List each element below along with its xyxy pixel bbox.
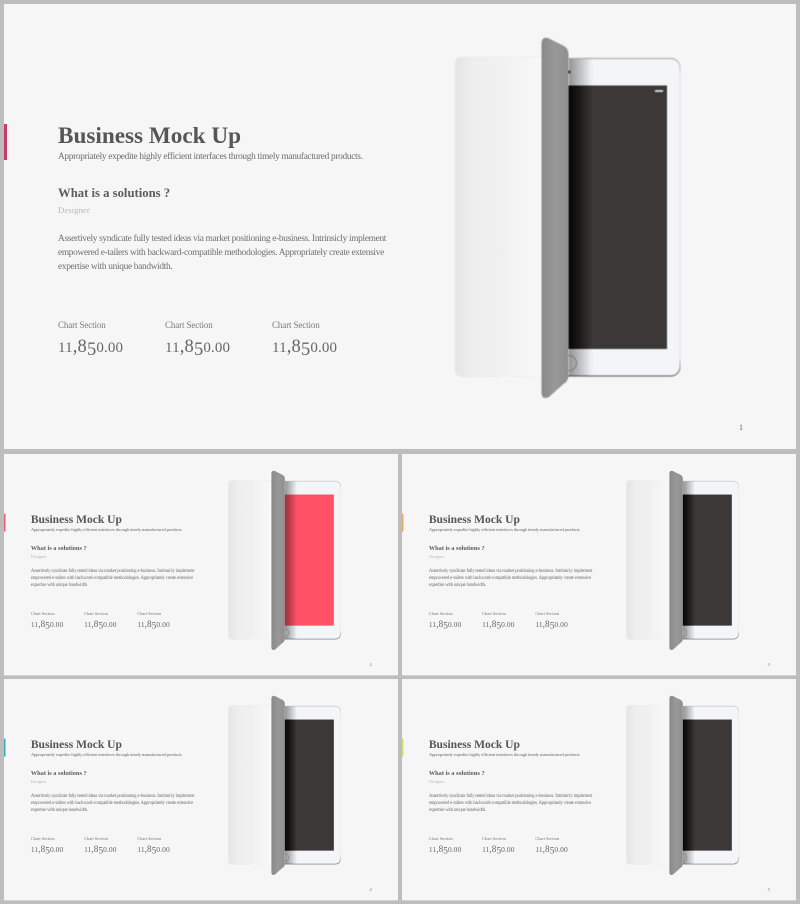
tablet mockup xyxy=(626,696,739,875)
body text xyxy=(429,793,592,813)
tablet mockup xyxy=(228,696,341,875)
body text: expertise with unique bandwidth. xyxy=(429,808,486,813)
tablet screen xyxy=(545,86,667,349)
value 1: 11,850.00 xyxy=(31,845,63,856)
title: Business Mock Up xyxy=(58,123,241,149)
slide 1: large xyxy=(4,4,796,449)
chart label 1: Chart Section xyxy=(429,611,453,616)
cover panel left xyxy=(626,480,650,640)
chart label 2: Chart Section xyxy=(84,611,108,616)
home button xyxy=(562,356,576,370)
chart label 1: Chart Section xyxy=(429,836,453,841)
role label: Designer xyxy=(429,554,445,559)
slide 3: orange accent xyxy=(402,454,796,675)
gray flap xyxy=(669,471,683,650)
chart label 3: Chart Section xyxy=(272,320,320,330)
value 3: 11,850.00 xyxy=(272,337,337,360)
role label: Designer xyxy=(58,205,90,215)
slide 2: pink xyxy=(4,454,398,675)
value 3: 11,850.00 xyxy=(137,845,170,856)
subtitle: Appropriately expedite highly efficient interfaces through timely manufactured products. xyxy=(31,753,182,758)
tablet body xyxy=(671,706,738,864)
page number: 4 xyxy=(370,887,372,892)
body text: Assertively syndicate fully tested ideas via market positioning e-business. Intrinsicly implement xyxy=(58,234,386,244)
page number: 5 xyxy=(768,887,770,892)
cover panel middle xyxy=(253,705,272,865)
value 1: 11,850.00 xyxy=(58,337,123,360)
cover panel middle xyxy=(651,705,670,865)
value 2: 11,850.00 xyxy=(84,620,117,631)
role label: Designer xyxy=(429,779,445,784)
chart label 1: Chart Section xyxy=(31,611,55,616)
cover panel left xyxy=(228,480,252,640)
home button xyxy=(281,854,289,861)
value 2: 11,850.00 xyxy=(482,620,515,631)
tablet mockup xyxy=(228,470,341,650)
subtitle: Appropriately expedite highly efficient interfaces through timely manufactured products. xyxy=(31,528,182,533)
chart label 2: Chart Section xyxy=(482,611,506,616)
gray flap xyxy=(542,38,568,398)
chart label 2: Chart Section xyxy=(84,836,108,841)
body text: Assertively syndicate fully tested ideas via market positioning e-business. Intrinsicly implement xyxy=(429,793,592,798)
body text xyxy=(429,568,592,588)
value 3: 11,850.00 xyxy=(535,620,568,631)
body text: empowered e-tailers with backward-compatible methodologies. Appropriately create extensive xyxy=(58,248,384,258)
subtitle: Appropriately expedite highly efficient interfaces through timely manufactured products. xyxy=(58,152,363,162)
subtitle: Appropriately expedite highly efficient interfaces through timely manufactured products. xyxy=(429,528,580,533)
body text: expertise with unique bandwidth. xyxy=(429,583,486,588)
heading: What is a solutions ? xyxy=(429,769,485,776)
title: Business Mock Up xyxy=(31,738,122,751)
body text xyxy=(58,234,386,272)
accent bar xyxy=(402,739,403,757)
page number: 3 xyxy=(768,662,770,667)
accent bar xyxy=(4,739,5,757)
subtitle: Appropriately expedite highly efficient interfaces through timely manufactured products. xyxy=(429,753,580,758)
body text: empowered e-tailers with backward-compatible methodologies. Appropriately create extensive xyxy=(429,575,591,580)
heading: What is a solutions ? xyxy=(31,769,87,776)
cover panel middle xyxy=(504,57,542,378)
body text: empowered e-tailers with backward-compatible methodologies. Appropriately create extensive xyxy=(31,575,193,580)
chart label 2: Chart Section xyxy=(482,836,506,841)
body text: Assertively syndicate fully tested ideas via market positioning e-business. Intrinsicly implement xyxy=(31,793,194,798)
gray flap xyxy=(271,696,285,875)
title: Business Mock Up xyxy=(429,738,520,751)
slide 5: lime accent xyxy=(402,679,796,900)
tablet body xyxy=(273,706,340,864)
cover panel middle xyxy=(651,480,670,640)
tablet screen xyxy=(273,720,334,851)
cover panel left xyxy=(228,705,252,865)
heading: What is a solutions ? xyxy=(31,544,87,551)
cover panel middle xyxy=(253,480,272,640)
tablet body xyxy=(545,58,680,376)
chart label 2: Chart Section xyxy=(165,320,213,330)
body text xyxy=(31,793,194,813)
chart label 3: Chart Section xyxy=(137,611,161,616)
value 2: 11,850.00 xyxy=(84,845,117,856)
tablet screen xyxy=(273,495,334,626)
value 1: 11,850.00 xyxy=(429,620,461,631)
heading: What is a solutions ? xyxy=(58,186,170,200)
tablet screen xyxy=(671,495,732,626)
tablet body xyxy=(273,481,340,639)
chart label 3: Chart Section xyxy=(137,836,161,841)
value 1: 11,850.00 xyxy=(429,845,461,856)
value 3: 11,850.00 xyxy=(535,845,568,856)
cover panel left xyxy=(455,57,502,377)
body text xyxy=(31,568,194,588)
tablet mockup xyxy=(626,470,739,650)
title: Business Mock Up xyxy=(31,513,122,526)
tablet body xyxy=(671,481,738,639)
body text: expertise with unique bandwidth. xyxy=(58,262,172,272)
value 1: 11,850.00 xyxy=(31,620,63,631)
body text: expertise with unique bandwidth. xyxy=(31,583,88,588)
body text: expertise with unique bandwidth. xyxy=(31,808,88,813)
body text: empowered e-tailers with backward-compatible methodologies. Appropriately create extensive xyxy=(429,800,591,805)
camera xyxy=(567,70,571,74)
role label: Designer xyxy=(31,554,47,559)
accent bar xyxy=(4,514,5,532)
body text: Assertively syndicate fully tested ideas via market positioning e-business. Intrinsicly implement xyxy=(429,568,592,573)
cover panel left xyxy=(626,705,650,865)
body text: Assertively syndicate fully tested ideas via market positioning e-business. Intrinsicly implement xyxy=(31,568,194,573)
title: Business Mock Up xyxy=(429,513,520,526)
value 3: 11,850.00 xyxy=(137,620,170,631)
chart label 3: Chart Section xyxy=(535,836,559,841)
value 2: 11,850.00 xyxy=(482,845,515,856)
accent bar xyxy=(402,514,403,532)
accent bar xyxy=(4,124,6,160)
home button xyxy=(281,629,289,636)
tablet screen xyxy=(671,720,732,851)
heading: What is a solutions ? xyxy=(429,544,485,551)
value 2: 11,850.00 xyxy=(165,337,230,360)
slide 4: teal accent xyxy=(4,679,398,900)
home button xyxy=(679,629,687,636)
chart label 3: Chart Section xyxy=(535,611,559,616)
page number: 2 xyxy=(370,662,372,667)
chart label 1: Chart Section xyxy=(58,320,106,330)
role label: Designer xyxy=(31,779,47,784)
body text: empowered e-tailers with backward-compatible methodologies. Appropriately create extensive xyxy=(31,800,193,805)
chart label 1: Chart Section xyxy=(31,836,55,841)
gray flap xyxy=(271,471,285,650)
gray flap xyxy=(669,696,683,875)
page number: 1 xyxy=(739,423,743,432)
home button xyxy=(679,854,687,861)
tablet mockup xyxy=(455,37,682,399)
